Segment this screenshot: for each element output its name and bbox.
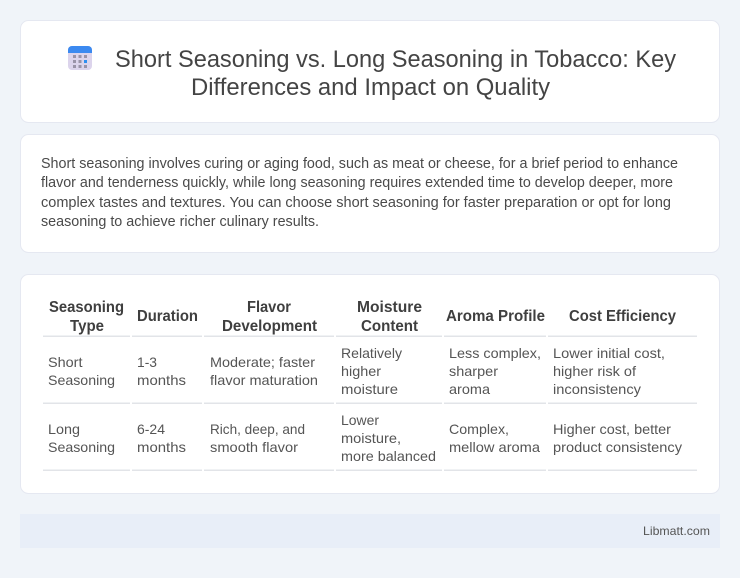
table header row (49, 299, 676, 335)
panel: title (20, 20, 720, 122)
table row: short seasoning: inconsistency (553, 381, 641, 397)
table header row: Aroma Profile (446, 308, 545, 325)
table row: short seasoning: Moderate; faster (210, 354, 315, 370)
table row: short seasoning: months (137, 372, 186, 388)
table header row: Cost Efficiency (569, 308, 676, 325)
table row: short seasoning: Short (48, 354, 83, 370)
table rules (43, 336, 697, 471)
table row: short seasoning: aroma (449, 381, 490, 397)
table row: short seasoning: higher risk of (553, 363, 636, 379)
table row: short seasoning (48, 345, 665, 397)
table row: long seasoning: Higher cost, better (553, 421, 671, 437)
table row: short seasoning: higher (341, 363, 381, 379)
table row: short seasoning: 1-3 (137, 354, 157, 370)
table header row: Flavor (247, 299, 291, 316)
table row: long seasoning: Rich, deep, and (210, 421, 305, 437)
table row: long seasoning: Lower (341, 412, 379, 428)
table row: long seasoning: months (137, 439, 186, 455)
table row: long seasoning: more balanced (341, 448, 436, 464)
table header row: Duration (137, 308, 198, 325)
table row: long seasoning: product consistency (553, 439, 682, 455)
table row: short seasoning: Less complex, (449, 345, 541, 361)
table header row: Seasoning (49, 299, 124, 316)
panel: comparison table (20, 274, 720, 494)
table row: short seasoning: Relatively (341, 345, 402, 361)
table row: long seasoning: mellow aroma (449, 439, 540, 455)
table row: long seasoning: moisture, (341, 430, 401, 446)
table row: long seasoning: Complex, (449, 421, 509, 437)
panel: introduction (20, 134, 720, 252)
table header row: Development (222, 318, 318, 335)
table header row: Moisture (357, 299, 422, 316)
table row: long seasoning: 6-24 (137, 421, 165, 437)
intro paragraph: complex tastes and textures. You can choose short seasoning for faster preparation or opt for long (41, 195, 671, 211)
table header row: Type (70, 318, 104, 335)
intro paragraph: Short seasoning involves curing or aging food, such as meat or cheese, for a brief period to enhance (41, 156, 678, 172)
table row: long seasoning (48, 412, 682, 464)
table row: short seasoning: sharper (449, 363, 498, 379)
intro paragraph: flavor and tenderness quickly, while long seasoning requires extended time to develop deeper, more (41, 175, 673, 191)
table header row: Content (361, 318, 419, 335)
table row: short seasoning: flavor maturation (210, 372, 318, 388)
title text (115, 46, 676, 101)
intro paragraph (41, 156, 678, 230)
icon: calendar (68, 46, 92, 70)
table row: short seasoning: Seasoning (48, 372, 115, 388)
intro paragraph: seasoning to achieve richer culinary results. (41, 214, 319, 230)
table row: short seasoning: moisture (341, 381, 398, 397)
table row: long seasoning: Long (48, 421, 80, 437)
table row: short seasoning: Lower initial cost, (553, 345, 665, 361)
title text: Short Seasoning vs. Long Seasoning in Tobacco: Key (115, 46, 676, 73)
table row: long seasoning: smooth flavor (210, 439, 298, 455)
footer bar (20, 514, 720, 548)
title text: Differences and Impact on Quality (191, 74, 550, 101)
table row: long seasoning: Seasoning (48, 439, 115, 455)
footer credit: Libmatt.com (643, 524, 710, 538)
